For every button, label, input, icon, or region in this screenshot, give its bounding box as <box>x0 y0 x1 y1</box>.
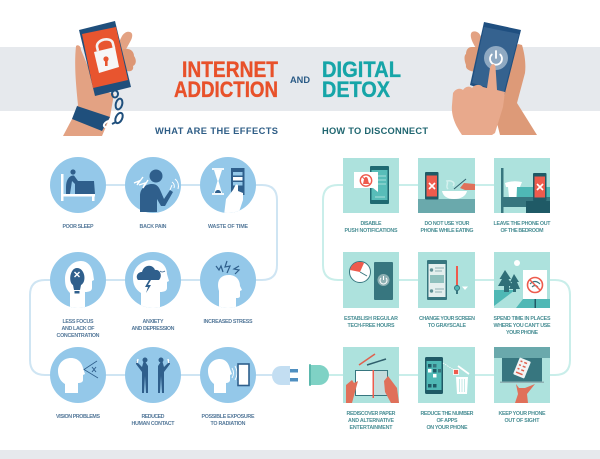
tip: do not use phone while eating <box>418 158 475 213</box>
effect: reduced human contact <box>125 347 181 403</box>
label: rediscover paper <box>346 411 396 431</box>
effect: poor sleep <box>50 157 106 213</box>
label: disable push notifications: DISABLE <box>360 221 382 227</box>
label: reduced human contact <box>132 414 175 427</box>
effect: back pain <box>125 157 181 213</box>
label: establish tech-free hours: ESTABLISH REGULAR <box>344 316 398 322</box>
label: keep phone out of sight: KEEP YOUR PHONE <box>498 411 546 417</box>
label: rediscover paper: AND ALTERNATIVE <box>348 418 394 424</box>
effect: vision problems <box>50 347 106 403</box>
tip: disable push notifications <box>343 158 399 213</box>
effect: possible exposure to radiation <box>200 347 256 403</box>
handcuff <box>72 106 110 131</box>
phone <box>470 22 521 97</box>
connector: disconnect path <box>323 185 570 375</box>
label: vision problems: VISION PROBLEMS <box>56 414 100 420</box>
title: Digital Detox: DETOX <box>322 77 390 102</box>
effect: less focus <box>50 252 106 312</box>
heading: how to disconnect: HOW TO DISCONNECT <box>322 126 428 136</box>
label: waste of time: WASTE OF TIME <box>208 224 248 230</box>
label: reduce number of apps: REDUCE THE NUMBER <box>420 411 474 417</box>
title: Internet Addiction: INTERNET <box>182 57 278 82</box>
label: rediscover paper: REDISCOVER PAPER <box>346 411 396 417</box>
label: possible exposure to radiation: TO RADIATION <box>210 421 246 427</box>
label: possible exposure to radiation <box>202 414 255 427</box>
label: reduced human contact: HUMAN CONTACT <box>132 421 175 427</box>
title: Internet Addiction: ADDICTION <box>174 77 278 102</box>
label: reduce number of apps: ON YOUR PHONE <box>426 425 468 431</box>
label: spend time in places without phone: YOUR PHONE <box>506 330 538 336</box>
label: establish tech-free hours: TECH-FREE HOURS <box>348 323 395 329</box>
label: change screen to grayscale: CHANGE YOUR SCREEN <box>419 316 475 322</box>
label: anxiety and depression <box>132 319 175 332</box>
effect: increased stress <box>200 252 256 312</box>
header band <box>0 47 600 111</box>
label: poor sleep: POOR SLEEP <box>62 224 94 230</box>
effect: anxiety and depression <box>125 252 181 312</box>
label: less focus: LESS FOCUS <box>62 319 94 325</box>
chain <box>103 90 124 129</box>
tip: rediscover paper <box>343 347 399 403</box>
label: disable push notifications <box>344 221 398 234</box>
pointing hand <box>452 64 505 135</box>
label: less focus <box>56 319 100 339</box>
label: do not use phone while eating: DO NOT USE YOUR <box>424 221 470 227</box>
phone <box>79 21 131 96</box>
tip: leave the phone out of the bedroom <box>494 158 550 213</box>
tip: change screen to grayscale <box>418 252 475 308</box>
label: anxiety and depression: AND DEPRESSION <box>132 326 175 332</box>
label: disable push notifications: PUSH NOTIFICATIONS <box>344 228 398 234</box>
heading: what are the effects: WHAT ARE THE EFFECTS <box>155 126 278 136</box>
label: anxiety and depression: ANXIETY <box>142 319 164 325</box>
tip: establish tech-free hours <box>343 252 399 308</box>
label: change screen to grayscale: TO GRAYSCALE <box>428 323 466 329</box>
label: spend time in places without phone: SPEND TIME IN PLACES <box>494 316 551 322</box>
illustration: chained hand holding locked phone <box>63 21 136 136</box>
label: reduce number of apps <box>420 411 474 431</box>
label: change screen to grayscale <box>419 316 475 329</box>
socket <box>309 364 329 386</box>
connector: effects path <box>30 185 277 375</box>
label: reduce number of apps: OF APPS <box>436 418 458 424</box>
padlock <box>94 39 119 73</box>
label: spend time in places without phone <box>494 316 551 336</box>
label: do not use phone while eating: PHONE WHILE EATING <box>420 228 474 234</box>
label: less focus: CONCENTRATION <box>56 333 100 339</box>
plug <box>272 366 298 385</box>
label: possible exposure to radiation: POSSIBLE EXPOSURE <box>202 414 255 420</box>
label: less focus: AND LACK OF <box>62 326 95 332</box>
illustration: hands pressing power button on phone <box>452 22 537 135</box>
power button <box>484 46 508 70</box>
label: rediscover paper: ENTERTAINMENT <box>350 425 393 431</box>
title: Internet Addiction <box>174 57 278 102</box>
effect: waste of time <box>200 157 256 215</box>
title: Digital Detox: DIGITAL <box>322 57 401 82</box>
label: leave the phone out of the bedroom: LEAVE THE PHONE OUT <box>494 221 551 227</box>
label: keep phone out of sight: OUT OF SIGHT <box>504 418 540 424</box>
label: back pain: BACK PAIN <box>140 224 167 230</box>
title: Digital Detox <box>322 57 401 102</box>
label: leave the phone out of the bedroom: OF THE BEDROOM <box>500 228 544 234</box>
label: reduced human contact: REDUCED <box>142 414 165 420</box>
label: establish tech-free hours <box>344 316 398 329</box>
label: leave the phone out of the bedroom <box>494 221 551 234</box>
title: and: AND <box>290 75 310 86</box>
tip: keep phone out of sight <box>494 347 550 403</box>
label: keep phone out of sight <box>498 411 546 424</box>
tip: spend time in places without phone <box>494 252 550 308</box>
tip: reduce number of apps <box>418 347 475 403</box>
label: do not use phone while eating <box>420 221 474 234</box>
label: increased stress: INCREASED STRESS <box>204 319 253 325</box>
label: spend time in places without phone: WHERE YOU CAN'T USE <box>494 323 551 329</box>
footer band <box>0 450 600 459</box>
